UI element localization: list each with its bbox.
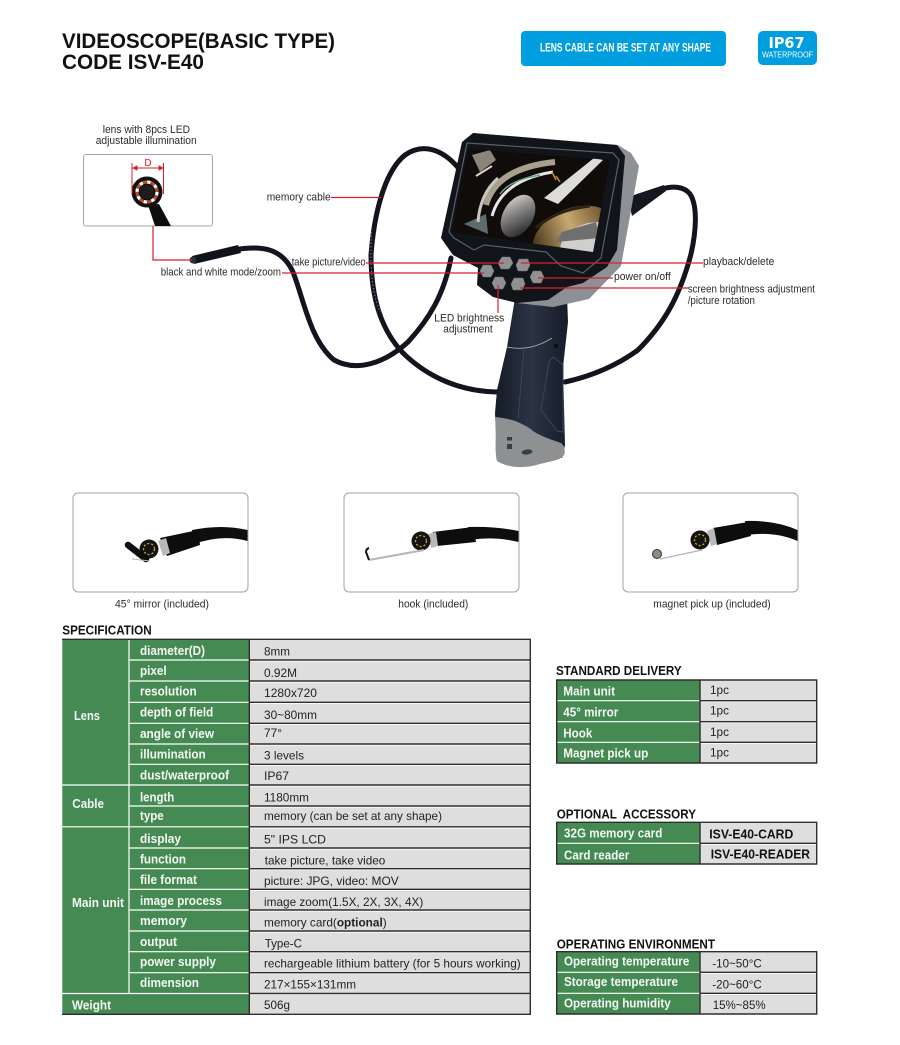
parameter values: image zoom(1.5X, 2X, 3X, 4X): [264, 895, 423, 909]
parameter names: output: [140, 935, 178, 949]
parameter names: memory: [140, 914, 187, 928]
callout labels: playback/delete: [703, 256, 774, 268]
parameter values: memory card(optional): [264, 916, 387, 930]
table: standard delivery: 45° mirror: [563, 706, 618, 720]
parameter values: 3 levels: [264, 748, 304, 762]
parameter names: diameter(D): [140, 644, 205, 658]
parameter values: 1280x720: [264, 686, 317, 700]
callout labels: LED brightness: [434, 313, 505, 325]
table: operating environment: Operating temperature: [564, 955, 689, 969]
parameter names: function: [140, 852, 186, 866]
callout labels: memory cable: [267, 192, 331, 204]
table: standard delivery: Hook: [563, 726, 592, 740]
caption: mirror: 45° mirror (included): [115, 599, 209, 611]
table: optional accessory: Card reader: [564, 848, 629, 862]
table: optional accessory: [557, 822, 817, 864]
title: [62, 29, 335, 74]
group labels: Cable: [72, 797, 104, 811]
handle: [495, 296, 568, 467]
table: standard delivery: 1pc: [710, 704, 729, 718]
panel: 45 degree mirror: [73, 493, 248, 592]
badge: IP67 waterproof: IP67: [768, 34, 804, 52]
parameter values: 1180mm: [264, 790, 309, 804]
parameter names: type: [140, 809, 164, 823]
parameter names: angle of view: [140, 727, 214, 741]
heading: standard delivery: STANDARD DELIVERY: [556, 664, 682, 678]
parameter values: take picture, take video: [265, 853, 386, 867]
table: standard delivery: Magnet pick up: [563, 746, 649, 760]
parameter values: 30~80mm: [264, 708, 317, 722]
parameter names: file format: [140, 873, 198, 887]
group labels: [72, 709, 125, 1012]
parameter names: display: [140, 832, 181, 846]
lens caption: adjustable illumination: [96, 135, 197, 147]
screen: [452, 149, 610, 252]
parameter values: picture: JPG, video: MOV: [264, 874, 399, 888]
callout: lens cable shape: [521, 31, 726, 66]
callout labels: screen brightness adjustment: [688, 284, 815, 296]
accessory: leader lines: [153, 198, 703, 313]
parameter values: [264, 645, 521, 1012]
title: CODE ISV-E40: [62, 50, 204, 74]
parameter names: depth of field: [140, 706, 213, 720]
callout labels: power on/off: [614, 271, 672, 283]
callout labels: adjustment: [443, 324, 493, 336]
panel: lens close-up: [84, 154, 212, 226]
panel: hook: [344, 493, 519, 592]
badge: IP67 waterproof: [758, 31, 817, 65]
lens caption: [96, 124, 197, 147]
table: specification: [62, 639, 530, 1014]
cables: [190, 149, 695, 392]
parameter names: image process: [140, 894, 222, 908]
callout labels: /picture rotation: [688, 295, 755, 307]
parameter values: 0.92M: [264, 666, 297, 680]
table: operating environment: -20~60°C: [712, 978, 762, 992]
table: operating environment: -10~50°C: [712, 957, 762, 971]
badge: IP67 waterproof: WATERPROOF: [762, 50, 813, 60]
caption: hook: hook (included): [398, 599, 468, 611]
parameter values: 506g: [264, 998, 290, 1012]
group labels: Lens: [74, 709, 100, 723]
parameter names: power supply: [140, 955, 216, 969]
table: standard delivery: 1pc: [710, 683, 729, 697]
title: VIDEOSCOPE(BASIC TYPE): [62, 29, 335, 53]
parameter values: 5" IPS LCD: [264, 832, 326, 846]
parameter names: resolution: [140, 685, 197, 699]
callout labels: black and white mode/zoom: [161, 267, 281, 279]
parameter values: 217×155×131mm: [264, 977, 356, 991]
parameter names: [140, 644, 230, 990]
panel: lens close-up: D: [144, 158, 152, 169]
parameter names: dust/waterproof: [140, 768, 230, 782]
parameter names: dimension: [140, 976, 199, 990]
table: standard delivery: [557, 680, 817, 763]
parameter names: illumination: [140, 747, 206, 761]
group labels: Weight: [72, 998, 112, 1012]
table: operating environment: Operating humidity: [564, 996, 671, 1010]
table: standard delivery: 1pc: [710, 725, 729, 739]
table: operating environment: [557, 952, 817, 1014]
parameter names: pixel: [140, 664, 167, 678]
parameter values: rechargeable lithium battery (for 5 hours working): [264, 957, 521, 971]
table: operating environment: 15%~85%: [713, 998, 766, 1012]
parameter values: Type-C: [265, 937, 302, 951]
parameter values: IP67: [264, 769, 289, 783]
parameter values: 77°: [264, 726, 282, 740]
heading: optional accessory: OPTIONAL ACCESSORY: [557, 807, 697, 821]
table: operating environment: Storage temperature: [564, 975, 678, 989]
device: videoscope: [441, 133, 639, 467]
callout labels: take picture/video: [292, 257, 366, 269]
parameter values: 8mm: [264, 645, 290, 659]
callout: lens cable shape: LENS CABLE CAN BE SET AT ANY SHAPE: [540, 42, 711, 54]
group labels: Main unit: [72, 896, 125, 910]
heading: operating environment: OPERATING ENVIRONMENT: [557, 937, 715, 951]
table: standard delivery: 1pc: [710, 745, 729, 759]
parameter names: length: [140, 791, 174, 805]
buttons: [480, 257, 544, 290]
caption: magnet: magnet pick up (included): [653, 599, 771, 611]
parameter values: memory (can be set at any shape): [264, 809, 442, 823]
lens caption: lens with 8pcs LED: [103, 124, 190, 136]
table: optional accessory: 32G memory card: [564, 827, 662, 841]
table: optional accessory: ISV-E40-READER: [711, 847, 810, 861]
table: standard delivery: Main unit: [563, 685, 616, 699]
housing: [473, 133, 639, 307]
heading: specification: SPECIFICATION: [62, 623, 152, 637]
panel: magnet pick up: [623, 493, 798, 592]
table: optional accessory: ISV-E40-CARD: [709, 827, 793, 841]
callout labels: [161, 192, 815, 336]
